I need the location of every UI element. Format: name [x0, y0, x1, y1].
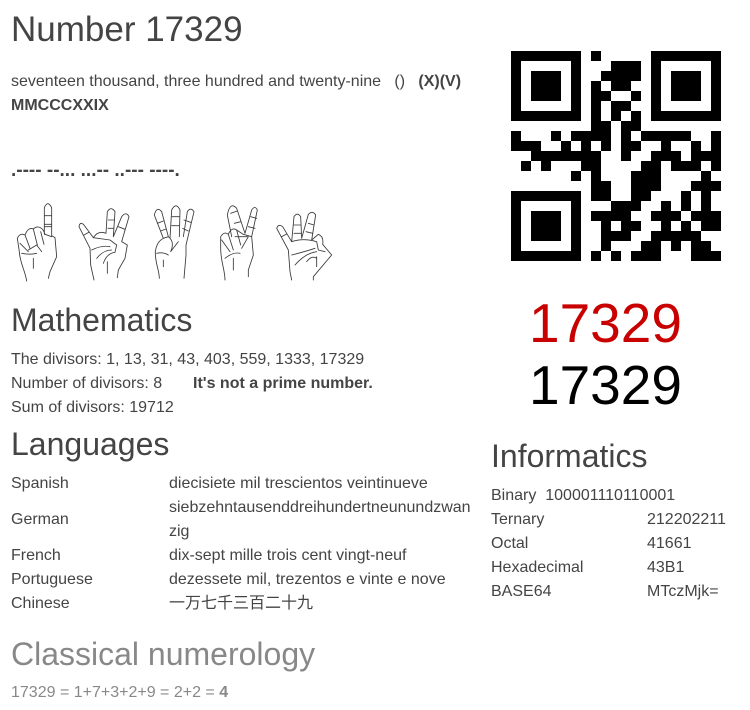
row: hexadecimal: Hexadecimal [491, 559, 583, 576]
row: French [11, 547, 406, 564]
row: Portuguese: dezessete mil, trezentos e vinte e nove [169, 571, 446, 588]
row: French: French [11, 547, 61, 564]
text: morse code: .---- --... ...-- ..--- ----. [11, 160, 180, 181]
panel: classical numerology [11, 636, 315, 701]
text: number of divisors and primality: Number of divisors: 8 [11, 375, 162, 392]
row: Chinese: Chinese [11, 595, 70, 612]
title: Number 17329 [11, 10, 243, 49]
row: octal: 41661 [647, 535, 692, 552]
row: Portuguese [11, 571, 446, 588]
row: German: German [11, 511, 69, 528]
row: German [11, 499, 471, 540]
panel: languages [11, 426, 471, 612]
text: number of divisors and primality [11, 375, 373, 392]
row: ternary: Ternary [491, 511, 544, 528]
row: binary: Binary 100001110110001 [491, 487, 675, 504]
row: base64: BASE64 [491, 583, 551, 600]
row: Chinese: 一万七千三百二十九 [169, 595, 313, 612]
row: octal: Octal [491, 535, 528, 552]
row: Portuguese: Portuguese [11, 571, 93, 588]
row: hexadecimal [491, 559, 684, 576]
text block: number in words and Roman numeral [11, 73, 461, 114]
heading: informatics: Informatics [491, 438, 647, 474]
panel: mathematics [11, 302, 373, 416]
row: French: dix-sept mille trois cent vingt-neuf [169, 547, 406, 564]
row: base64 [491, 583, 719, 600]
row: German: zig [169, 523, 189, 540]
text: sum of divisors: Sum of divisors: 19712 [11, 399, 174, 416]
panel: informatics [491, 438, 726, 600]
row: hexadecimal: 43B1 [647, 559, 684, 576]
row: ternary [491, 511, 726, 528]
row: Spanish: Spanish [11, 475, 69, 492]
row: ternary: 212202211 [647, 511, 726, 528]
big number in red: 17329 [529, 292, 682, 354]
heading: languages: Languages [11, 426, 169, 462]
heading: mathematics: Mathematics [11, 302, 192, 338]
row: Chinese [11, 594, 313, 612]
text: digit sum: 17329 = 1+7+3+2+9 = 2+2 = 4 [11, 684, 228, 701]
row: German: siebzehntausenddreihundertneunundzwan [169, 499, 471, 516]
row: Spanish: diecisiete mil trescientos veintinueve [169, 475, 428, 492]
icon: QR code [511, 51, 721, 261]
row: octal [491, 535, 692, 552]
text block: number in words and Roman numeral: seventeen thousand, three hundred and twenty-nine () (X)(V) [11, 73, 461, 90]
row: Spanish [11, 475, 428, 492]
text: number of divisors and primality: It's not a prime number. [193, 375, 373, 392]
row: base64: MTczMjk= [647, 583, 719, 600]
heading: classical numerology: Classical numerology [11, 636, 315, 672]
text block: number in words and Roman numeral: MMCCCXXIX [11, 97, 109, 114]
text: divisors: The divisors: 1, 13, 31, 43, 403, 559, 1333, 17329 [11, 351, 364, 368]
big number in black: 17329 [529, 354, 682, 416]
icon: sign language hands [16, 203, 332, 282]
